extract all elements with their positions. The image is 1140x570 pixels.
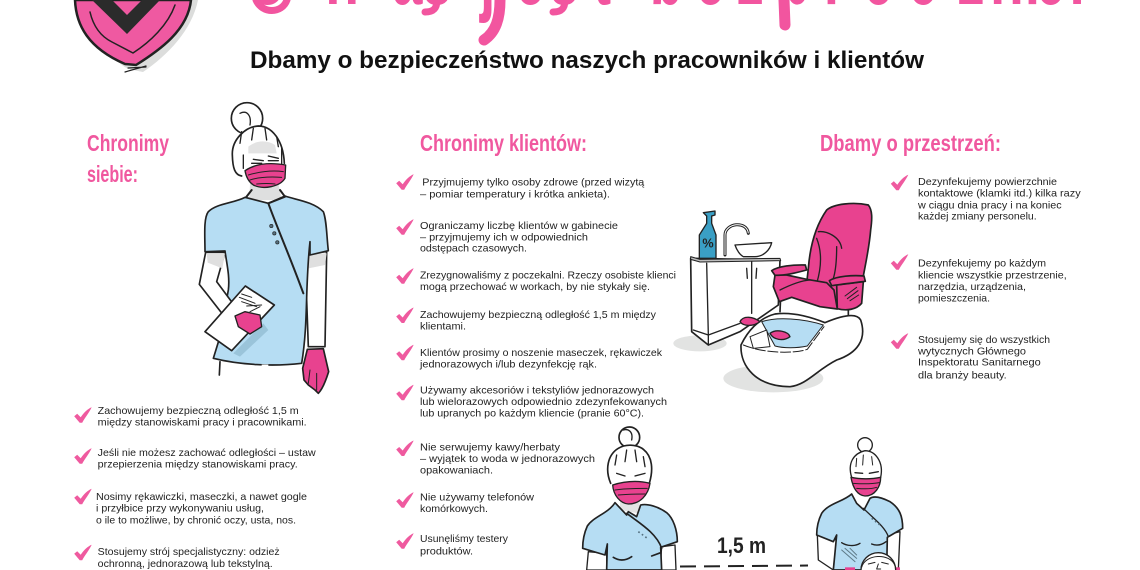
item: – przyjmujemy ich w odpowiednich — [420, 231, 588, 243]
item: jednorazowych i/lub dezynfekcję rąk. — [419, 359, 597, 371]
nurse head — [231, 103, 286, 200]
item: Przyjmujemy tylko osoby zdrowe (przed wizytą — [422, 177, 644, 189]
item — [396, 440, 595, 476]
heading: Chronimy siebie: Chronimy — [87, 130, 169, 156]
illustration: nurse with clipboard — [199, 103, 329, 393]
item: komórkowych. — [420, 503, 488, 515]
panel: Chronimy klientów — [396, 130, 676, 557]
item: wytycznych Głównego — [917, 345, 1026, 357]
item — [396, 384, 667, 420]
item: Nosimy rękawiczki, maseczki, a nawet gogle — [96, 491, 307, 503]
subtitle: Dbamy o bezpieczeństwo naszych pracowników i klientów — [250, 47, 924, 74]
item: Stosujemy strój specjalistyczny: odzież — [98, 546, 280, 558]
item: o ile to możliwe, by chronić oczy, usta, nos. — [96, 515, 296, 527]
item — [891, 333, 1050, 381]
item: mogą przechować w workach, by nie stykały się. — [420, 281, 650, 293]
item: kontaktowe (klamki itd.) kilka razy — [918, 188, 1081, 200]
item — [396, 492, 534, 515]
item — [891, 175, 1081, 222]
illustration: nurse right with client — [817, 438, 903, 570]
item: ochronną, jednorazową lub tekstylną. — [98, 558, 273, 570]
item: lub wielorazowych odpowiednio zdezynfekowanych — [420, 396, 667, 408]
heading: Chronimy klientów: Chronimy klientów: — [420, 130, 587, 156]
item: kliencie wszystkie przestrzenie, — [918, 269, 1067, 281]
panel: Chronimy siebie — [74, 103, 329, 570]
item: – pomiar temperatury i krótka ankieta). — [420, 188, 610, 200]
item — [74, 545, 280, 570]
item: Klientów prosimy o noszenie maseczek, rękawiczek — [420, 347, 663, 359]
item: lub upranych po każdym kliencie (pranie 60°C). — [420, 408, 644, 420]
distance label: 1,5 m with dashed line — [680, 533, 808, 566]
item: odstępach czasowych. — [420, 243, 527, 255]
item — [396, 174, 644, 200]
checklist: Chronimy siebie — [74, 405, 316, 570]
item: Stosujemy się do wszystkich — [918, 334, 1050, 346]
item: między stanowiskami pracy i pracownikami. — [98, 417, 307, 429]
item: klientami. — [420, 320, 466, 332]
item: opakowaniach. — [420, 464, 493, 476]
item: Nie używamy telefonów — [420, 492, 534, 504]
item — [396, 219, 618, 255]
item: w ciągu dnia pracy i na koniec — [917, 199, 1062, 211]
item: pomieszczenia. — [918, 293, 990, 305]
item — [396, 268, 676, 293]
item: Dezynfekujemy po każdym — [918, 258, 1046, 270]
item: dla branży beauty. — [918, 369, 1007, 381]
item — [396, 345, 663, 371]
item: narzędzia, urządzenia, — [918, 281, 1026, 293]
checklist: Dbamy o przestrzeń — [891, 175, 1081, 381]
item: produktów. — [420, 545, 473, 557]
item: Zrezygnowaliśmy z poczekalni. Rzeczy osobiste klienci — [420, 269, 676, 281]
item — [396, 308, 657, 332]
item: Zachowujemy bezpieczną odległość 1,5 m — [98, 405, 299, 417]
illustration: pedicure chair, sink and disinfectant: % — [702, 236, 714, 250]
item: – wyjątek to woda w jednorazowych — [420, 453, 595, 465]
item — [74, 489, 307, 527]
item — [891, 254, 1067, 305]
item: Zachowujemy bezpieczną odległość 1,5 m między — [420, 309, 657, 321]
heading: Chronimy siebie — [87, 130, 169, 187]
illustration: nurse left, distance scene — [583, 427, 677, 570]
item: przepierzenia między stanowiskami pracy. — [98, 458, 298, 470]
title — [248, 0, 1086, 40]
item: Jeśli nie możesz zachować odległości – ustaw — [98, 447, 316, 459]
item: Dezynfekujemy powierzchnie — [918, 176, 1057, 188]
heading: Dbamy o przestrzeń: Dbamy o przestrzeń: — [820, 130, 1001, 156]
illustration: pedicure chair, sink and disinfectant — [673, 203, 872, 392]
item: Ograniczamy liczbę klientów w gabinecie — [420, 220, 618, 232]
heading: Chronimy siebie: siebie: — [87, 161, 138, 187]
item: i przyłbice przy wykonywaniu usług, — [96, 503, 264, 515]
item: Nie serwujemy kawy/herbaty — [420, 442, 561, 454]
item — [74, 405, 307, 429]
icon: shield logo — [75, 0, 198, 72]
checklist: Chronimy klientów — [396, 174, 676, 557]
item: Używamy akcesoriów i tekstyliów jednorazowych — [420, 384, 654, 396]
panel: Dbamy o przestrzeń — [820, 130, 1081, 381]
item: Usunęliśmy testery — [420, 533, 509, 545]
nurse body — [199, 190, 329, 393]
item: Inspektoratu Sanitarnego — [918, 357, 1041, 369]
item — [396, 533, 509, 557]
distance label: 1,5 m with dashed line: 1,5 m — [717, 533, 766, 558]
item: każdej zmiany personelu. — [918, 210, 1037, 222]
item — [74, 447, 316, 470]
